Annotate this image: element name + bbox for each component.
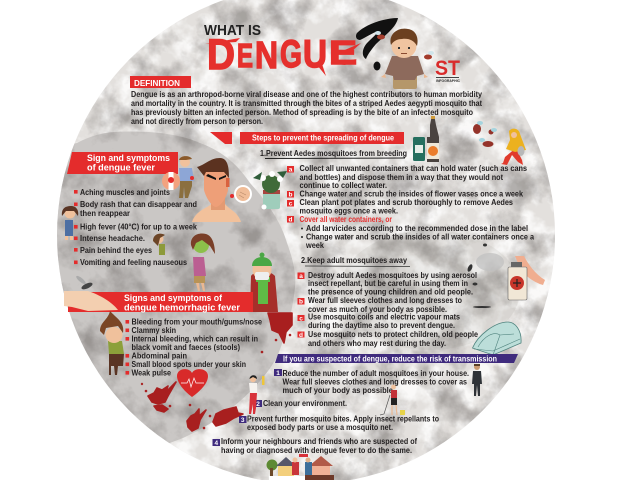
symptom list: Vomiting and feeling nauseous xyxy=(80,258,188,267)
heading banner: Sign and symptoms xyxy=(87,153,170,164)
icon: woman vacuuming xyxy=(380,385,405,415)
icon: man standing xyxy=(472,364,482,396)
heading banner: of dengue fever xyxy=(87,162,155,174)
breeding steps: Cover all water containers, or xyxy=(300,215,392,224)
icon: man with headache xyxy=(192,158,241,222)
transmission steps: Wear full sleeves clothes and long dresses to cover as xyxy=(282,378,467,386)
symptom list: Small blood spots under your skin xyxy=(132,360,246,369)
keep away steps: b xyxy=(299,298,303,306)
icon: nauseous girl xyxy=(191,233,215,291)
icon: question mark xyxy=(356,18,398,70)
subheading: keep mosquitoes away: 2.Keep adult mosquitoes away xyxy=(301,256,407,265)
logo: ST: ST xyxy=(435,57,460,80)
icon: person in yellow suit spraying xyxy=(501,129,526,165)
title: dengue brush lettering: E xyxy=(329,34,357,71)
keep away steps: d xyxy=(299,332,303,339)
icon: joint pain circle xyxy=(162,172,180,190)
heading banner: Steps to prevent the spreading of dengue xyxy=(252,134,394,142)
keep away steps: and others who may rest during the day. xyxy=(308,339,446,348)
symptom list: Pain behind the eyes xyxy=(80,246,152,255)
definition text: has previously bitten an infected person. Method of spreading is by the bite of an infected mosquito xyxy=(131,107,473,117)
heading banner: Signs and symptoms of xyxy=(124,293,223,304)
symptom list: then reappear xyxy=(80,209,130,218)
symptom list: Weak pulse xyxy=(132,368,171,378)
definition text: and not directly from person to person. xyxy=(131,116,263,126)
symptom list: Body rash that can disappear and xyxy=(80,200,197,209)
keep away steps: the presence of young children and old people. xyxy=(308,288,473,296)
title: what is: WHAT IS xyxy=(204,22,261,39)
symptom list: Intense headache. xyxy=(80,234,145,243)
keep away steps: Wear full sleeves clothes and long dresses to xyxy=(308,296,462,305)
icon: heart with pulse xyxy=(177,369,208,397)
transmission steps: 2 xyxy=(256,401,260,408)
breeding steps: mosquito eggs once a week. xyxy=(300,206,398,216)
title: dengue brush lettering: E xyxy=(237,37,253,74)
title: dengue brush lettering: N xyxy=(255,35,278,77)
icon: mosquito net xyxy=(472,322,521,355)
transmission steps: 3 xyxy=(241,417,245,424)
icon: houses and neighbours xyxy=(266,454,334,480)
title: dengue brush lettering: D xyxy=(207,31,235,79)
transmission steps: much of your body as possible. xyxy=(282,386,395,395)
title xyxy=(204,22,361,79)
panel: steps to prevent the spreading of dengue xyxy=(210,116,545,355)
title: dengue brush lettering xyxy=(205,31,361,79)
keep away steps: a xyxy=(299,273,303,280)
symptom list: High fever (40°C) for up to a week xyxy=(80,222,198,232)
icon: hand in circle xyxy=(230,185,252,203)
icon: girl with overalls xyxy=(62,206,78,240)
definition text xyxy=(131,89,482,126)
symptom list: Bleeding from your mouth/gums/nose xyxy=(132,318,262,326)
symptom list: Aching muscles and joints xyxy=(80,188,170,197)
icon: flies on wall xyxy=(466,244,491,308)
title: dengue brush lettering: U xyxy=(303,33,327,76)
panel: reduce the risk of transmission xyxy=(212,354,518,480)
definition text: Dengue is as an arthropod-borne viral disease and one of the highest contributors to human morbidity xyxy=(131,89,482,99)
breeding steps: Add larvicides according to the recommended dose in the label xyxy=(306,224,528,233)
symptom list: Internal bleeding, which can result in xyxy=(132,334,258,344)
transmission steps: 4 xyxy=(214,440,218,447)
icon: can and bottle xyxy=(413,116,439,162)
icon: mosquitoes near boy xyxy=(375,31,434,60)
icon: spray can with hand xyxy=(476,253,545,300)
subheading: prevent breeding: 1.Prevent Aedes mosquitoes from breeding xyxy=(260,149,407,158)
icon: flower vase xyxy=(253,171,287,210)
definition text: and mortality in the country. It is transmitted through the bites of a striped Aedes aegypti mosquito that xyxy=(131,98,482,108)
symptom list xyxy=(126,318,262,378)
symptom list xyxy=(74,188,198,267)
heading banner xyxy=(68,292,253,314)
breeding steps: a xyxy=(289,166,293,174)
keep away steps: during the daytime also to prevent dengue. xyxy=(308,321,455,330)
breeding steps: and bottles) and dispose them in a way that they would not xyxy=(300,173,503,182)
icon: bleeding kid xyxy=(100,311,124,375)
symptom list: Abdominal pain xyxy=(132,352,187,360)
definition heading xyxy=(130,76,191,88)
breeding steps: continue to collect water. xyxy=(300,181,387,190)
keep away steps: Use mosquito nets to protect children, old people xyxy=(308,330,478,339)
transmission steps: Clean your environment. xyxy=(263,399,347,408)
breeding steps: week xyxy=(305,241,324,250)
breeding steps: Change water and scrub the insides of flower vases once a week xyxy=(300,190,523,198)
title: dengue brush lettering: G xyxy=(280,33,302,76)
keep away steps: cover as much of your body as possible. xyxy=(308,305,447,314)
keep away steps: Use mosquito coils and electric vapour mats xyxy=(308,312,460,322)
icon: sick boy xyxy=(381,29,428,89)
heading banner xyxy=(67,152,178,174)
panel: signs and symptoms of dengue hemorrhagic fever xyxy=(64,275,292,431)
icon: arm with mosquito xyxy=(64,275,118,311)
logo: ST: INFOGRAPHIC xyxy=(436,79,460,83)
symptom list: black vomit and faeces (stools) xyxy=(132,343,240,352)
transmission steps: Reduce the number of adult mosquitoes in your house. xyxy=(282,369,469,378)
icon: woman with spray xyxy=(249,375,264,414)
symptom list: Clammy skin xyxy=(132,326,176,335)
breeding steps: Clean plant pot plates and scrub thoroughly to remove Aedes xyxy=(300,198,513,207)
panel: sign and symptoms of dengue fever xyxy=(62,152,278,312)
keep away steps: insect repellant, but be careful in using them in xyxy=(308,279,468,288)
icon: mosquitoes top right xyxy=(473,121,497,147)
breeding steps: b xyxy=(289,192,293,198)
blood splatters xyxy=(142,313,292,431)
keep away steps xyxy=(298,271,478,348)
keep away steps: Destroy adult Aedes mosquitoes by using aerosol xyxy=(308,271,477,280)
icon: boy with scarf and mask xyxy=(250,252,278,312)
breeding steps: Collect all unwanted containers that can hold water (such as cans xyxy=(300,164,528,173)
breeding steps: c xyxy=(289,200,293,208)
breeding steps: Change water and scrub the insides of all water containers once a xyxy=(306,232,534,242)
panel: definition xyxy=(130,76,482,126)
breeding steps: d xyxy=(289,216,293,224)
transmission steps: 1 xyxy=(276,370,280,377)
transmission steps: having or diagnosed with dengue fever to do the same. xyxy=(221,446,412,455)
purple banner: If you are suspected of dengue, reduce the risk of transmission xyxy=(283,354,497,364)
keep away steps: c xyxy=(299,315,303,322)
icon: small girl xyxy=(153,234,165,255)
heading banner: dengue hemorrhagic fever xyxy=(124,302,240,314)
icon: man holding arm xyxy=(179,156,194,198)
transmission steps: exposed body parts or use a mosquito net. xyxy=(247,423,393,432)
transmission steps: Prevent further mosquito bites. Apply insect repellants to xyxy=(247,414,439,424)
transmission steps: Inform your neighbours and friends who are suspected of xyxy=(221,437,417,446)
heading banner xyxy=(210,132,404,144)
definition heading: DEFINITION xyxy=(134,78,180,88)
transmission steps xyxy=(212,369,469,455)
breeding steps xyxy=(287,164,534,250)
